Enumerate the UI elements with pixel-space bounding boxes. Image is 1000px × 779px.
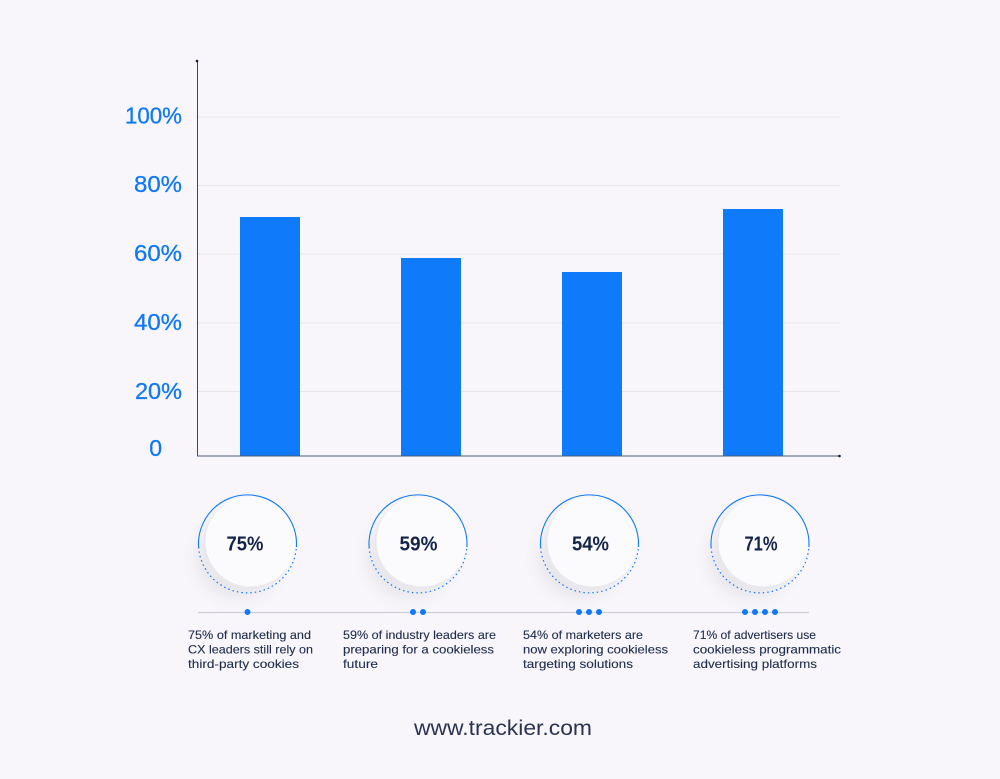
y-axis labels [125,102,182,461]
caption: 54% [523,628,668,671]
caption: 71%: advertising platforms [693,657,817,671]
y-axis labels: 100% [125,102,182,128]
caption: 71% [693,628,841,671]
stat circle: 59%: 59% [400,534,438,556]
axes [196,60,841,457]
timeline with dot markers [198,609,809,615]
caption: 71%: 71% of advertisers use [693,628,816,642]
stat circle: 59% [367,495,467,598]
caption: 75% [188,628,313,671]
y-axis labels: 60% [134,240,182,266]
caption: 59%: preparing for a cookieless [343,642,494,656]
bar: 71% [723,209,783,456]
y-axis labels: 40% [134,309,182,335]
y-axis labels: 80% [134,171,182,197]
caption: 71%: cookieless programmatic [693,642,841,656]
caption: 59% [343,628,496,671]
y-axis labels: 20% [135,378,182,404]
caption: 75%: 75% of marketing and [188,628,311,642]
stat circle: 75%: 75% [226,534,264,556]
stat circle: 71% [709,495,809,598]
stat circle: 54%: 54% [572,534,609,556]
caption: 59%: 59% of industry leaders are [343,628,496,642]
bar chart [125,60,841,461]
caption: 54%: targeting solutions [523,657,633,671]
caption: 59%: future [343,657,378,671]
y-axis labels: 0 [149,435,162,461]
caption: 54%: now exploring cookieless [523,642,668,656]
bar: 75% [240,217,300,456]
bar: 59% [401,258,461,456]
stat circle: 71%: 71% [744,534,778,556]
stat circle: 54% [538,495,638,598]
caption: 54%: 54% of marketers are [523,628,643,642]
caption: 75%: third-party cookies [188,657,299,671]
website footer: www.trackier.com [413,717,592,740]
stat circle: 75% [196,495,296,598]
bar: 54% [562,272,622,456]
caption: 75%: CX leaders still rely on [188,642,313,656]
